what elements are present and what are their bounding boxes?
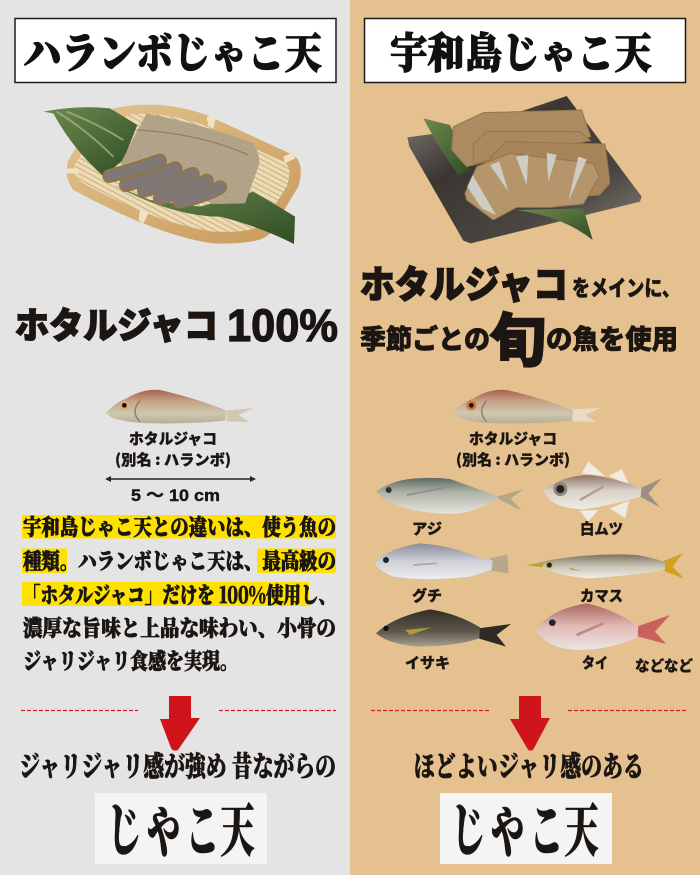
fish: アジ [376,478,523,514]
label: ホタルジャコ: ホタルジャコ [129,428,217,449]
divider and arrow: right [371,696,686,751]
label: ホタルジャコ right: ホタルジャコ [469,428,557,449]
fish: 白ムツ [543,462,662,522]
label: タイ: タイ [582,652,608,673]
fish: カマス [527,553,684,579]
text block: explanation with highlights: ジャリジャリ食感を実現。 [23,645,238,676]
label: などなど: などなど [635,655,693,676]
label: グチ: グチ [412,585,442,606]
heading box: ハランボじゃこ天 [15,18,336,82]
fish: イサキ [376,609,511,647]
claim: ホタルジャコ100% [15,297,338,351]
claim: ホタルジャコ100%: 100% [227,300,338,351]
fish: グチ [375,543,509,579]
heading box: 宇和島じゃこ天: 宇和島じゃこ天 [390,31,652,78]
claim: ホタルジャコをメインに、季節ごとの旬の魚を使用: をメインに、 [572,271,680,303]
text block: explanation with highlights: 「ホタルジャコ」だけを 100%使用し、 [23,579,336,610]
text block: explanation with highlights: 宇和島じゃこ天との違いは、使う魚の [23,511,336,542]
text block: explanation with highlights: 濃厚な旨味と上品な味わい、小骨の [23,612,336,643]
divider and arrow: left [21,696,336,751]
claim: ホタルジャコをメインに、季節ごとの旬の魚を使用: 季節ごとの [360,318,490,357]
label: 5〜10 cm: 5 〜 10 cm [131,486,220,505]
claim: ホタルジャコ100%: ホタルジャコ [15,297,218,349]
label: カマス: カマス [580,585,623,606]
fish: ホタルジャコ (right) [453,390,601,423]
photo: hálanbo jakoten on bamboo tray [43,105,301,244]
caption: left conclusion: ジャリジャリ感が強め 昔ながらの [19,745,336,785]
claim: ホタルジャコをメインに、季節ごとの旬の魚を使用: 旬 [489,294,546,378]
panel: right background [350,0,700,875]
photo: uwajima jakoten on dark plate [407,96,642,243]
label: 別名 ハランボ right: (別名 : ハランボ) [456,449,570,470]
fish: ホタルジャコ (left) [106,390,254,423]
claim: ホタルジャコをメインに、季節ごとの旬の魚を使用: の魚を使用 [546,318,678,357]
label: 別名 ハランボ: (別名 : ハランボ) [115,449,231,470]
claim: ホタルジャコをメインに、季節ごとの旬の魚を使用 [360,254,680,378]
text block: explanation with highlights: 種類。ハランボじゃこ天は、最高級の [23,545,336,576]
heading box: ハランボじゃこ天: ハランボじゃこ天 [24,32,322,78]
heading box: 宇和島じゃこ天 [364,18,686,82]
fish: タイ [536,603,670,650]
label box: じゃこ天 right: じゃこ天 [451,768,599,872]
label: イサキ: イサキ [405,652,450,673]
label: 白ムツ: 白ムツ [580,518,623,539]
label: アジ: アジ [412,518,442,539]
label box: じゃこ天 left: じゃこ天 [107,768,255,872]
arrow: length range [105,476,256,482]
claim: ホタルジャコをメインに、季節ごとの旬の魚を使用: ホタルジャコ [360,254,568,309]
text block: explanation with highlights [22,511,336,676]
panel: left background [0,0,350,875]
